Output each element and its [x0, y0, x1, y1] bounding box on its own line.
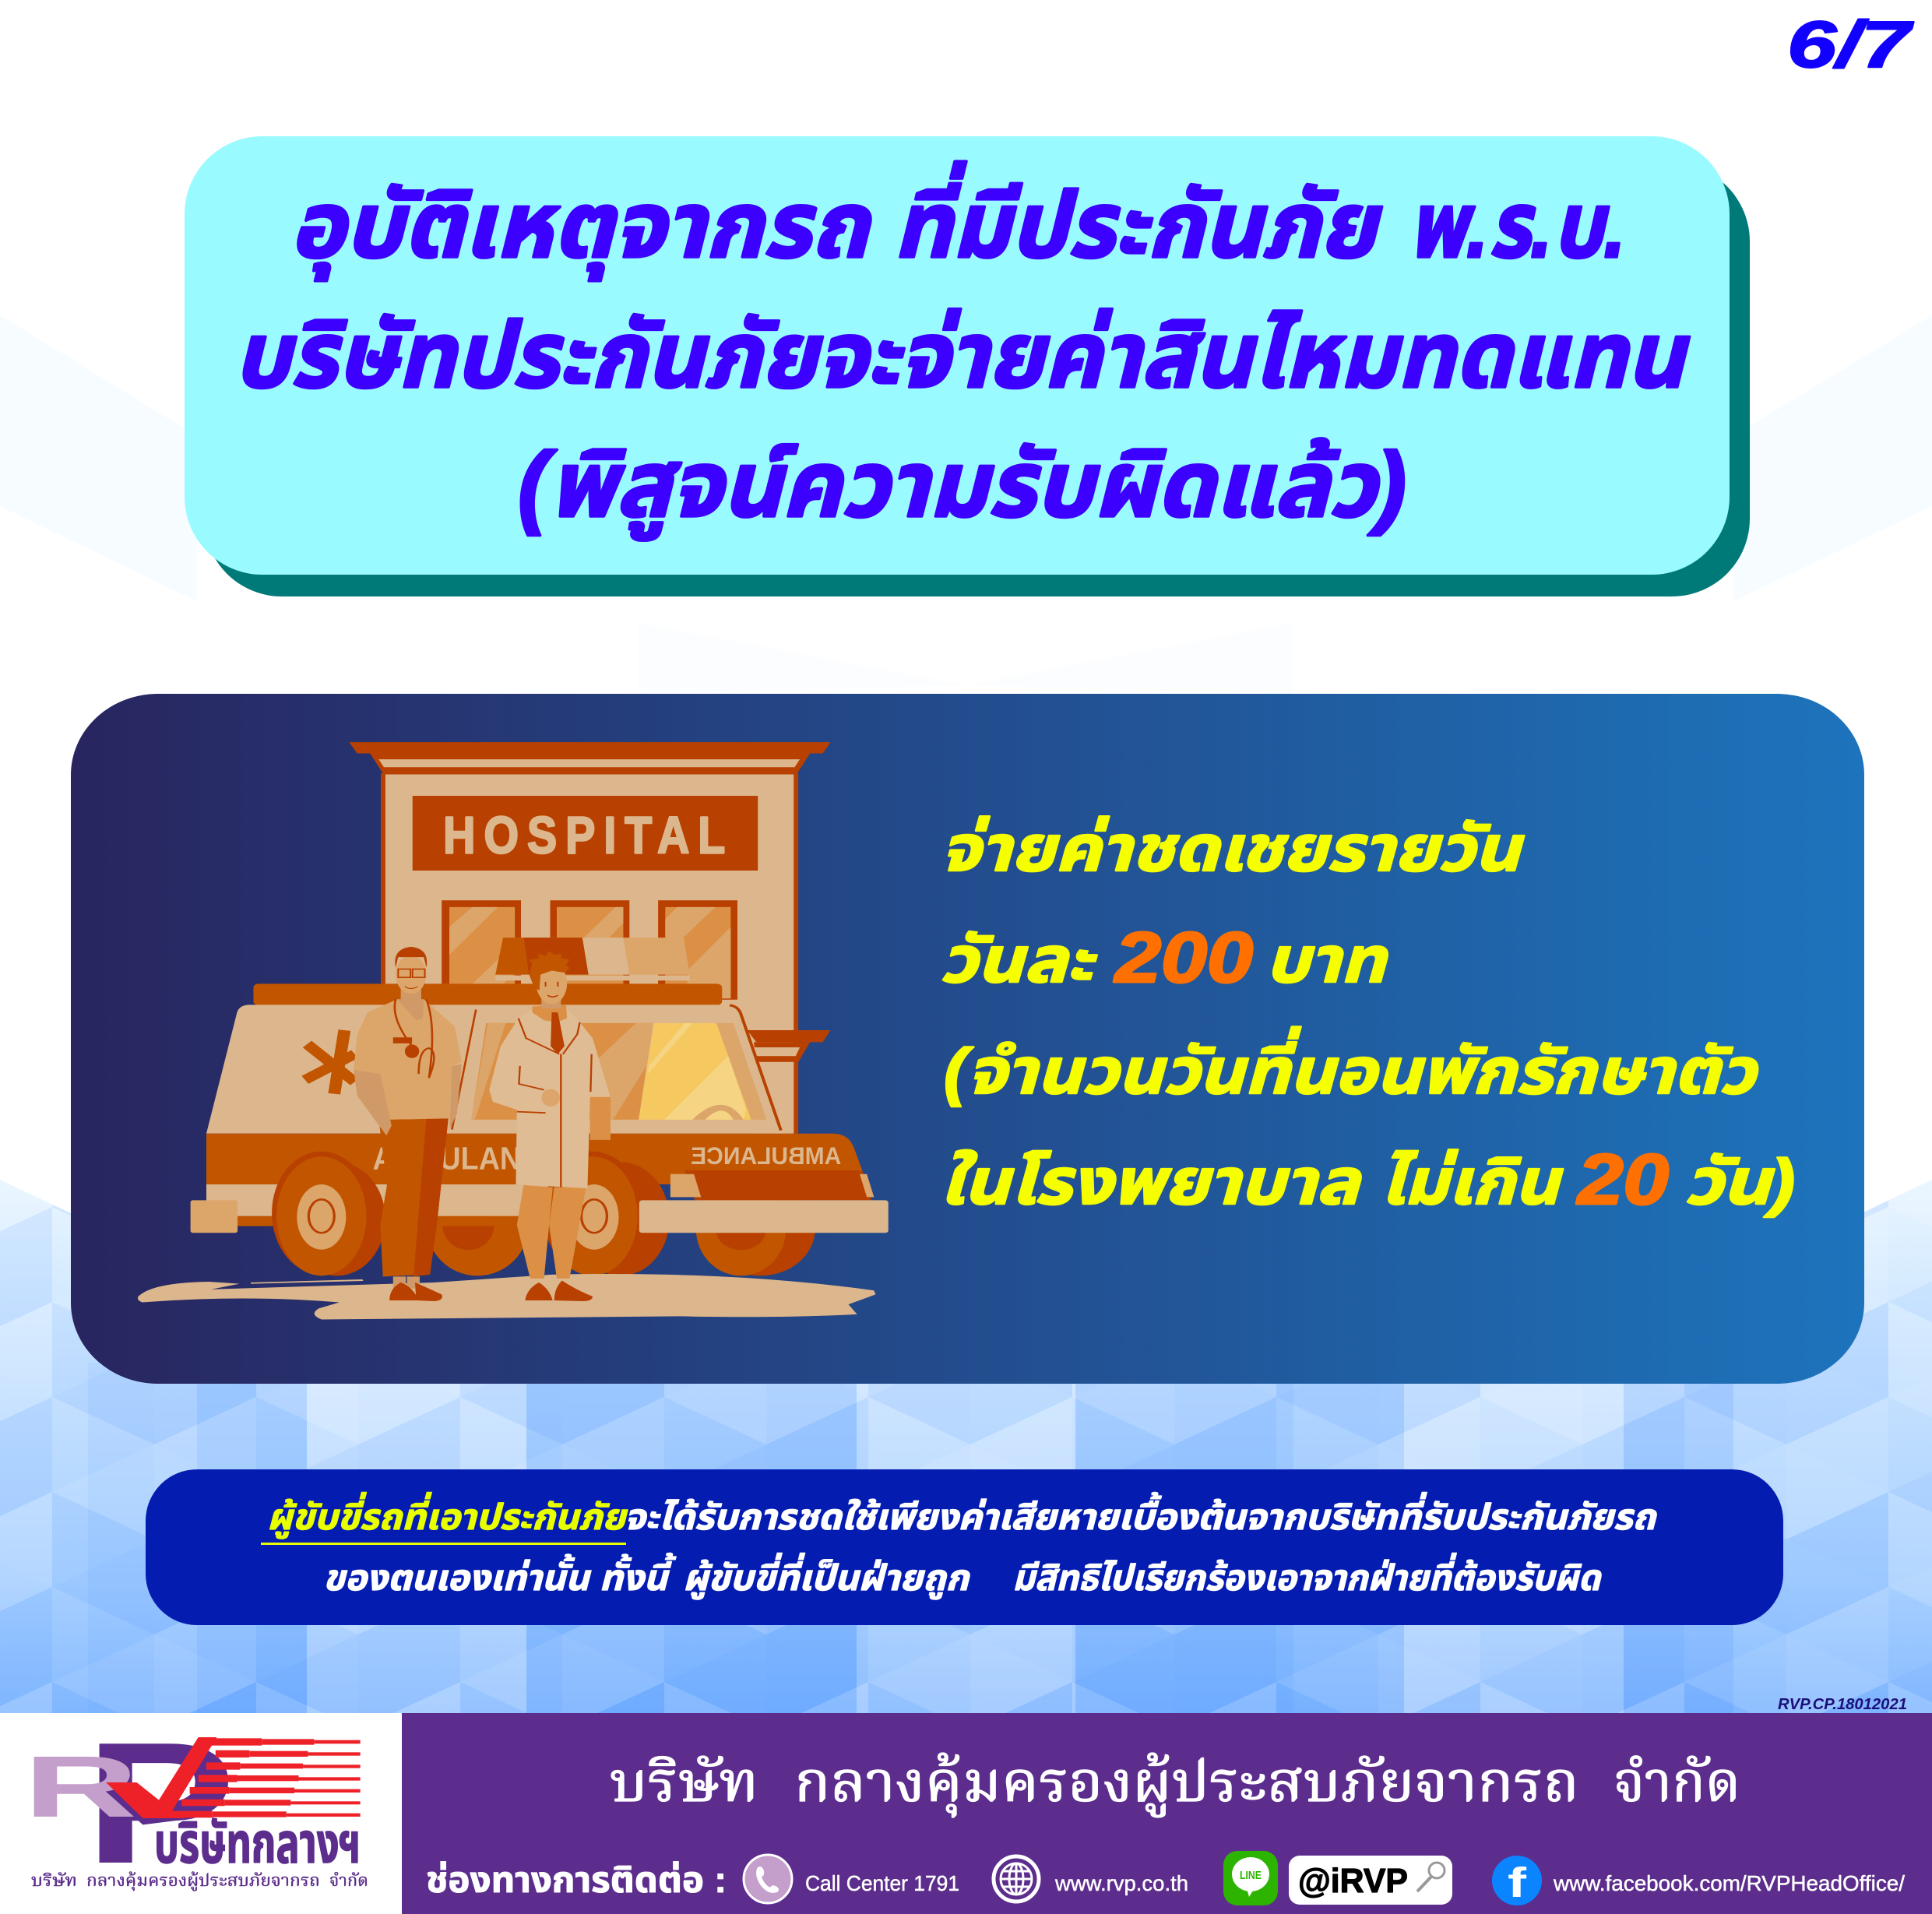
- page number: 6/7: [1787, 8, 1913, 81]
- LINE id box: [1289, 1856, 1452, 1905]
- contact label: ช่องทางการติดต่อ :: [426, 1859, 727, 1900]
- line 1: จ่ายค่าชดเชยรายวัน: [941, 814, 1525, 885]
- logo: จำกัด: [329, 1871, 368, 1890]
- ambulance: [191, 938, 889, 1275]
- footer: [0, 1707, 1932, 1914]
- icon: facebook: [1492, 1856, 1542, 1906]
- logo: บริษัท: [31, 1871, 77, 1890]
- logo: บริษัทกลางฯ: [154, 1813, 361, 1875]
- title line 2: บริษัทประกันภัยจะจ่ายค่าสินไหมทดแทน: [234, 304, 1691, 407]
- highlighted phrase: ผู้ขับขี่รถที่เอาประกันภัย: [267, 1492, 628, 1539]
- line 2: 200: [1114, 918, 1253, 997]
- icon: phone: [744, 1855, 792, 1903]
- logo: [23, 1707, 368, 1900]
- company name: [610, 1751, 1740, 1817]
- icon: LINE: [1223, 1851, 1278, 1905]
- website: www.rvp.co.th: [1054, 1871, 1188, 1895]
- doctor in white coat: [489, 951, 611, 1301]
- line 2: [940, 918, 1388, 997]
- LINE id box: @iRVP: [1298, 1862, 1408, 1900]
- line 3: (จำนวนวันที่นอนพักรักษาตัว: [944, 1026, 1758, 1107]
- ambulance: AMBULANCE: [373, 1140, 562, 1176]
- company name: กลางคุ้มครองผู้ประสบภัยจากรถ: [794, 1751, 1579, 1817]
- title line 1: พ.ร.บ.: [1408, 174, 1626, 277]
- line 4: 20: [1576, 1140, 1669, 1219]
- logo: กลางคุ้มครองผู้ประสบภัยจากรถ: [86, 1871, 320, 1891]
- ground: [138, 1274, 875, 1319]
- icon: facebook: f: [1508, 1859, 1527, 1906]
- call center: Call Center 1791: [805, 1871, 959, 1895]
- title line 1: อุบัติเหตุจากรถ: [290, 174, 871, 281]
- note line 2: ของตนเองเท่านั้น ทั้งนี้: [323, 1553, 677, 1598]
- line 2: บาท: [1265, 925, 1388, 996]
- line 2: วันละ: [940, 925, 1097, 996]
- document code: RVP.CP.18012021: [1778, 1696, 1907, 1713]
- company name: บริษัท: [610, 1751, 758, 1814]
- ambulance: AMBULANCE: [691, 1142, 841, 1170]
- logo: P: [84, 1707, 236, 1900]
- text block: compensation details: [940, 814, 1795, 1219]
- facebook url: www.facebook.com/RVPHeadOffice/: [1553, 1871, 1905, 1895]
- doctor with stethoscope: [354, 947, 462, 1301]
- panel: daily compensation: [71, 694, 1864, 1384]
- note line 2: [323, 1553, 1602, 1600]
- panel: note: [146, 1469, 1783, 1625]
- hospital building: HOSPITAL: [443, 807, 734, 864]
- title line 1: [290, 161, 1626, 281]
- company name: จำกัด: [1614, 1751, 1740, 1814]
- icon: LINE: LINE: [1240, 1869, 1262, 1882]
- note line 1: จะได้รับการชดใช้เพียงค่าเสียหายเบื้องต้นจากบริษัทที่รับประกันภัยรถ: [625, 1492, 1657, 1537]
- line 4: วัน): [1684, 1147, 1795, 1218]
- illustration: hospital, ambulance and doctors: [138, 742, 889, 1319]
- logo: R: [23, 1738, 139, 1835]
- note line 2: มีสิทธิไปเรียกร้องเอาจากฝ่ายที่ต้องรับผิด: [1012, 1553, 1602, 1598]
- line 4: ไม่เกิน: [1380, 1147, 1563, 1218]
- icon: globe: [994, 1856, 1039, 1902]
- line 4: ในโรงพยาบาล: [940, 1147, 1361, 1218]
- note line 2: ผู้ขับขี่ที่เป็นฝ่ายถูก: [683, 1553, 970, 1600]
- hospital building: [349, 742, 831, 1134]
- panel: title: [185, 136, 1750, 596]
- title line 1: ที่มีประกันภัย: [893, 161, 1382, 277]
- line 4: [940, 1140, 1795, 1219]
- title line 3: (พิสูจน์ความรับผิดแล้ว): [518, 434, 1406, 541]
